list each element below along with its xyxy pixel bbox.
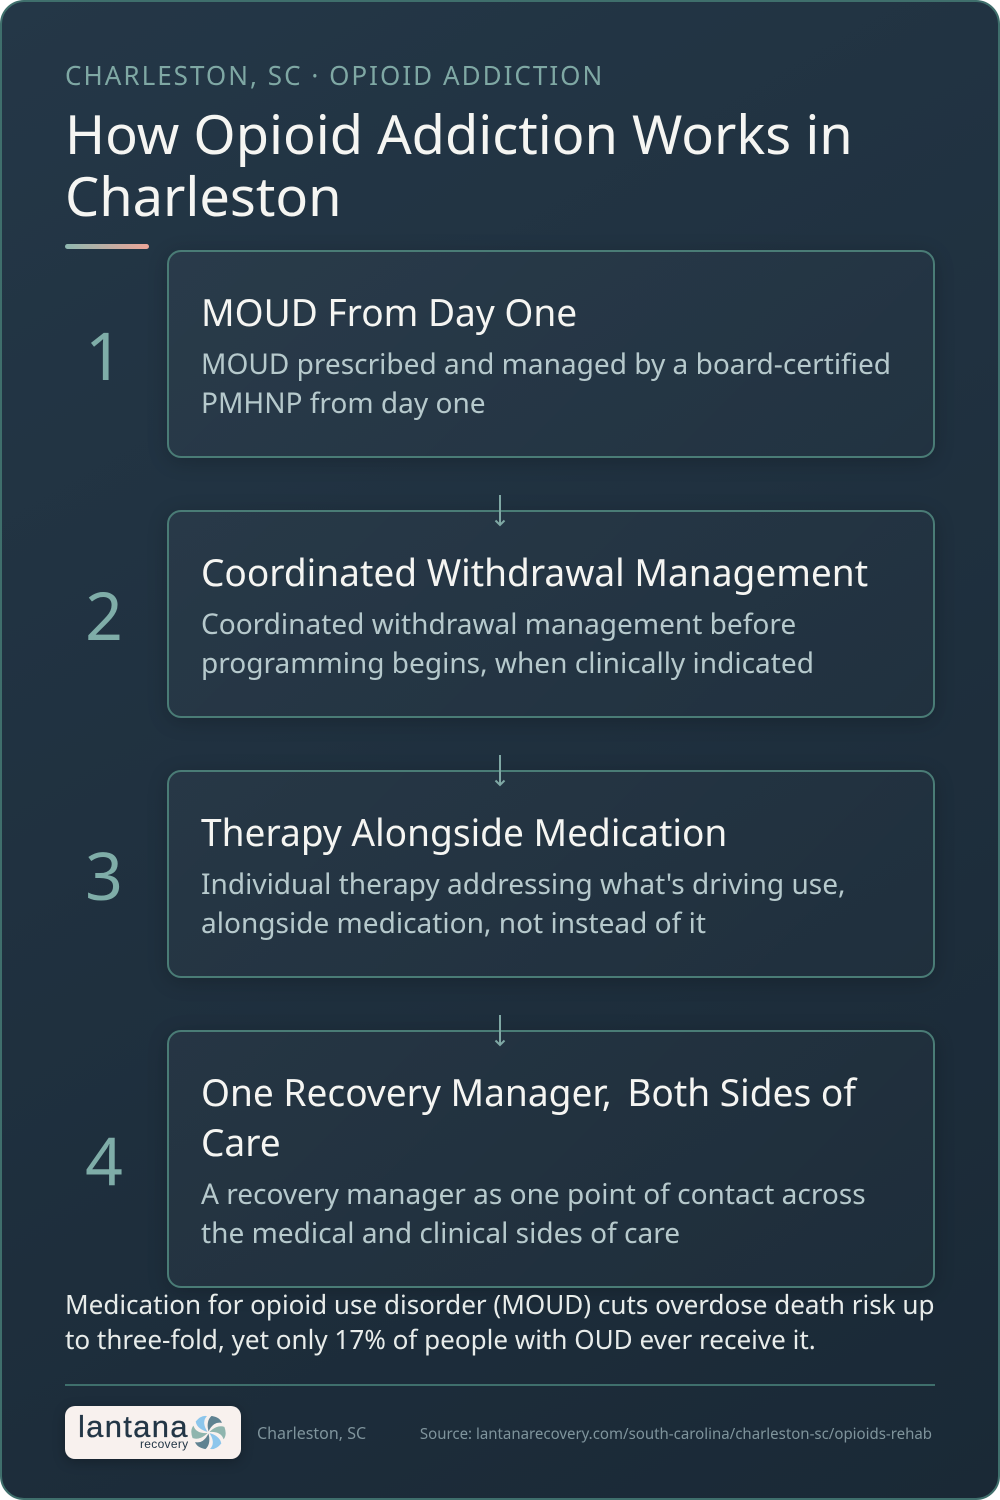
title: Charleston [65,158,342,232]
step 4 card [167,1030,935,1288]
step 1 card [167,250,935,458]
step 3 description [201,865,846,942]
footer source: Source: lantanarecovery.com/south-carolina/charleston-sc/opioids-rehab [420,1424,932,1444]
step 1 heading: MOUD From Day One [201,286,577,337]
logo: lantana recovery [65,1406,241,1459]
arrow: step 3 to 4 [494,1015,506,1046]
logo subtitle: recovery [140,1437,188,1451]
footer location: Charleston, SC [257,1422,366,1444]
title: How Opioid Addiction Works in [65,96,853,170]
step 1 number: 1 [85,310,123,400]
step 4 heading: Care [201,1116,281,1167]
step 3 description: alongside medication, not instead of it [201,904,706,942]
step 1 description [201,345,891,422]
title [65,96,853,232]
step 3 card [167,770,935,978]
logo wordmark: lantana [78,1409,189,1444]
step 4 description: A recovery manager as one point of contact across [201,1175,866,1213]
step 2 number: 2 [85,570,123,660]
step 4 number: 4 [85,1115,123,1205]
step 2 card [167,510,935,718]
footer divider [65,1384,935,1386]
step 3 heading: Therapy Alongside Medication [201,806,727,857]
statistic note [65,1286,935,1357]
statistic note: to three-fold, yet only 17% of people with OUD ever receive it. [65,1321,816,1357]
step 3 number: 3 [85,830,123,920]
step 2 description [201,605,814,682]
step 1 description: PMHNP from day one [201,384,486,422]
step 4 heading: One Recovery Manager, Both Sides of [201,1066,856,1117]
arrow: step 2 to 3 [494,755,506,786]
step 4 heading [201,1066,858,1167]
step 4 description: the medical and clinical sides of care [201,1214,680,1252]
eyebrow: location and topic: CHARLESTON, SC · OPIOID ADDICTION [65,57,604,93]
arrow: step 1 to 2 [494,495,506,526]
icon: logo swirl [191,1416,226,1450]
step 1 description: MOUD prescribed and managed by a board-certified [201,345,891,383]
step 4 description [201,1175,866,1252]
statistic note: Medication for opioid use disorder (MOUD) cuts overdose death risk up [65,1286,935,1322]
step 3 description: Individual therapy addressing what's driving use, [201,865,846,903]
step 2 description: programming begins, when clinically indicated [201,644,814,682]
step 2 heading: Coordinated Withdrawal Management [201,546,868,597]
title accent rule [65,244,149,249]
step 2 description: Coordinated withdrawal management before [201,605,796,643]
